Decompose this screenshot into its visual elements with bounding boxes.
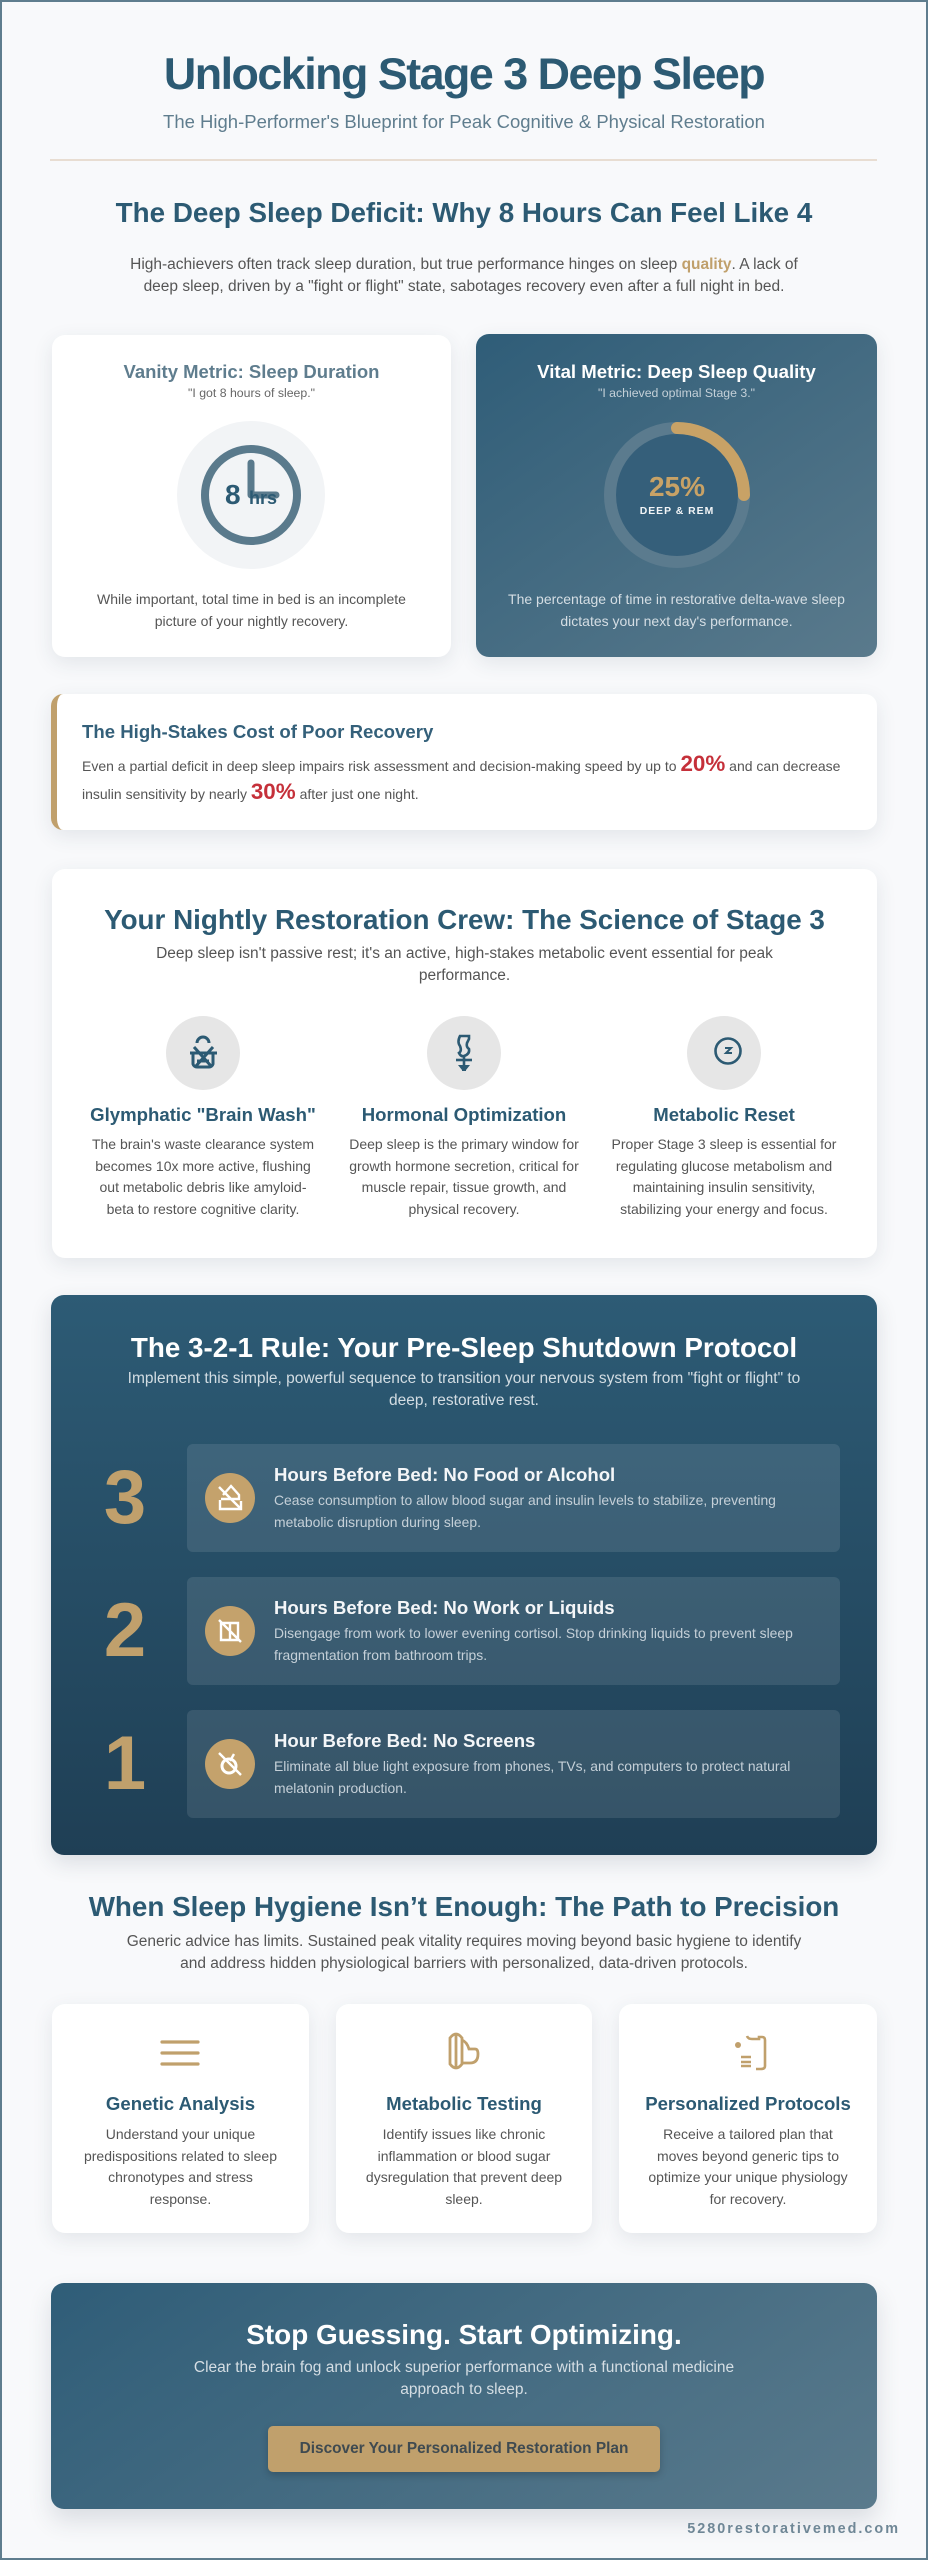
- step 2 text: Disengage from work to lower evening cortisol. Stop drinking liquids to prevent sleep: [274, 1625, 793, 1641]
- step 2 title: Hours Before Bed: No Work or Liquids: [274, 1597, 615, 1618]
- crew item: glymphatic text: out metabolic debris like amyloid-: [100, 1179, 306, 1195]
- step 3 text: metabolic disruption during sleep.: [274, 1514, 481, 1530]
- crew item: glymphatic title: Glymphatic "Brain Wash": [90, 1104, 316, 1125]
- metabolic testing text: dysregulation that prevent deep: [366, 2169, 562, 2185]
- metabolic testing text: inflammation or blood sugar: [378, 2148, 550, 2164]
- crew item: glymphatic text: becomes 10x more active, flushing: [95, 1158, 311, 1174]
- callout text: [82, 751, 840, 804]
- protocols text: optimize your unique physiology: [648, 2169, 848, 2185]
- genetic text: response.: [150, 2191, 211, 2207]
- callout: cost of poor recovery: [51, 694, 877, 830]
- cta text: Clear the brain fog and unlock superior performance with a functional medicine: [194, 2359, 734, 2376]
- callout text: Even a partial deficit in deep sleep impairs risk assessment and decision-making speed by up to 20% and can decrease: [82, 751, 840, 776]
- crew item: hormonal text: [349, 1136, 579, 1217]
- crew item: hormonal text: growth hormone secretion, critical for: [349, 1158, 579, 1174]
- crew item: hormonal text: muscle repair, tissue growth, and: [362, 1179, 566, 1195]
- vanity body: [97, 591, 406, 629]
- intro text: High-achievers often track sleep duration, but true performance hinges on sleep quality. A lack of: [130, 256, 798, 273]
- rule heading: The 3-2-1 Rule: Your Pre-Sleep Shutdown Protocol: [131, 1332, 797, 1363]
- genetic text: predispositions related to sleep: [84, 2148, 277, 2164]
- crew item: metabolic text: regulating glucose metabolism and: [616, 1158, 832, 1174]
- donut chart: DEEP & REM: [640, 506, 714, 517]
- donut chart: [604, 422, 750, 568]
- title: Unlocking Stage 3 Deep Sleep: [164, 49, 764, 99]
- metabolic testing text: [366, 2126, 562, 2207]
- callout text: insulin sensitivity by nearly 30% after just one night.: [82, 778, 419, 804]
- crew item: glymphatic text: beta to restore cognitive clarity.: [107, 1201, 299, 1217]
- metabolic testing text: sleep.: [445, 2191, 483, 2207]
- vital body: The percentage of time in restorative delta-wave sleep: [508, 591, 845, 607]
- protocols text: moves beyond generic tips to: [657, 2148, 839, 2164]
- crew intro: performance.: [419, 967, 510, 984]
- icon: no work: [205, 1606, 255, 1656]
- rule intro: [128, 1370, 800, 1409]
- crew item: hormonal text: Deep sleep is the primary window for: [349, 1136, 579, 1152]
- heading: path to precision: When Sleep Hygiene Isn’t Enough: The Path to Precision: [89, 1891, 839, 1922]
- callout heading: The High-Stakes Cost of Poor Recovery: [82, 721, 433, 742]
- protocols text: for recovery.: [710, 2191, 786, 2207]
- vanity heading: Vanity Metric: Sleep Duration: [124, 361, 379, 382]
- heading: deep sleep deficit: The Deep Sleep Deficit: Why 8 Hours Can Feel Like 4: [116, 197, 812, 228]
- crew item: metabolic text: maintaining insulin sensitivity,: [633, 1179, 815, 1195]
- vital body: [508, 591, 845, 629]
- step 1 text: [274, 1758, 790, 1796]
- crew item: metabolic title: Metabolic Reset: [653, 1104, 795, 1125]
- step 1 box: [187, 1710, 840, 1818]
- icon: clipboard: [735, 2036, 766, 2070]
- step 3 text: Cease consumption to allow blood sugar and insulin levels to stabilize, preventing: [274, 1492, 776, 1508]
- panel: personalized protocols: [619, 2004, 877, 2233]
- genetic text: Understand your unique: [106, 2126, 255, 2142]
- icon: no food: [205, 1473, 255, 1523]
- icon: metabolic reset: [687, 1016, 761, 1090]
- protocols text: [648, 2126, 848, 2207]
- icon: brain wash: [166, 1016, 240, 1090]
- step 3 text: [274, 1492, 776, 1530]
- panel: vanity metric: [52, 335, 451, 657]
- genetic title: Genetic Analysis: [106, 2093, 255, 2114]
- intro text: [130, 256, 798, 295]
- precision intro: Generic advice has limits. Sustained peak vitality requires moving beyond basic hygiene to identify: [127, 1933, 801, 1950]
- step 3 title: Hours Before Bed: No Food or Alcohol: [274, 1464, 615, 1485]
- vanity body: picture of your nightly recovery.: [155, 613, 348, 629]
- rule intro: deep, restorative rest.: [389, 1392, 539, 1409]
- crew heading: Your Nightly Restoration Crew: The Science of Stage 3: [104, 904, 825, 935]
- step 2 number: 2: [104, 1588, 146, 1673]
- cta heading: Stop Guessing. Start Optimizing.: [246, 2319, 682, 2350]
- clock icon: [177, 421, 325, 569]
- crew item: hormonal title: Hormonal Optimization: [362, 1104, 566, 1125]
- panel: genetic analysis: [52, 2004, 309, 2233]
- panel: 3-2-1 rule: [51, 1295, 877, 1855]
- step 2 box: [187, 1577, 840, 1685]
- crew item: glymphatic text: The brain's waste clearance system: [92, 1136, 314, 1152]
- cta button: [268, 2426, 660, 2472]
- vanity body: While important, total time in bed is an incomplete: [97, 591, 406, 607]
- step 1 title: Hour Before Bed: No Screens: [274, 1730, 535, 1751]
- step 1 text: melatonin production.: [274, 1780, 407, 1796]
- vital quote: "I achieved optimal Stage 3.": [598, 386, 755, 400]
- genetic text: [84, 2126, 277, 2207]
- step 3 number: 3: [104, 1455, 146, 1540]
- crew item: glymphatic text: [92, 1136, 314, 1217]
- step 1 text: Eliminate all blue light exposure from phones, TVs, and computers to protect natural: [274, 1758, 790, 1774]
- clock icon: 8: [225, 479, 241, 510]
- vanity quote: "I got 8 hours of sleep.": [188, 386, 315, 400]
- step 2 text: fragmentation from bathroom trips.: [274, 1647, 487, 1663]
- precision intro: [127, 1933, 802, 1972]
- protocols title: Personalized Protocols: [645, 2093, 851, 2114]
- icon: lines: [160, 2040, 200, 2066]
- donut chart: 25%: [649, 471, 705, 502]
- genetic text: chronotypes and stress: [108, 2169, 253, 2185]
- subtitle: The High-Performer's Blueprint for Peak Cognitive & Physical Restoration: [163, 111, 765, 132]
- crew item: hormonal text: physical recovery.: [408, 1201, 520, 1217]
- precision intro: and address hidden physiological barriers with personalized, data-driven protocols.: [180, 1955, 748, 1972]
- clock icon: hrs: [249, 488, 277, 508]
- step 2 text: [274, 1625, 793, 1663]
- crew item: metabolic text: Proper Stage 3 sleep is essential for: [612, 1136, 836, 1152]
- panel: metabolic testing: [336, 2004, 592, 2233]
- footer url: 5280restorativemed.com: [687, 2521, 900, 2537]
- crew item: metabolic text: [612, 1136, 836, 1217]
- cta text: approach to sleep.: [400, 2381, 528, 2398]
- metabolic testing title: Metabolic Testing: [386, 2093, 542, 2114]
- cta text: [194, 2359, 734, 2398]
- cta button: Discover Your Personalized Restoration Plan: [300, 2440, 628, 2457]
- step 1 number: 1: [104, 1721, 146, 1806]
- icon: hormone: [427, 1016, 501, 1090]
- crew intro: [156, 945, 773, 984]
- panel: restoration crew: [52, 869, 877, 1258]
- vital body: dictates your next day's performance.: [560, 613, 793, 629]
- vital heading: Vital Metric: Deep Sleep Quality: [537, 361, 816, 382]
- icon: no screens: [205, 1739, 255, 1789]
- crew item: metabolic text: stabilizing your energy and focus.: [620, 1201, 828, 1217]
- metabolic testing text: Identify issues like chronic: [383, 2126, 545, 2142]
- panel: vital metric: [476, 334, 877, 657]
- protocols text: Receive a tailored plan that: [663, 2126, 833, 2142]
- rule intro: Implement this simple, powerful sequence to transition your nervous system from "fight or flight" to: [128, 1370, 800, 1387]
- icon: test tube: [448, 2032, 480, 2070]
- intro text: deep sleep, driven by a "fight or flight" state, sabotages recovery even after a full night in bed.: [144, 278, 784, 295]
- crew intro: Deep sleep isn't passive rest; it's an active, high-stakes metabolic event essential for peak: [156, 945, 773, 962]
- step 3 box: [187, 1444, 840, 1552]
- panel: call to action: [51, 2283, 877, 2509]
